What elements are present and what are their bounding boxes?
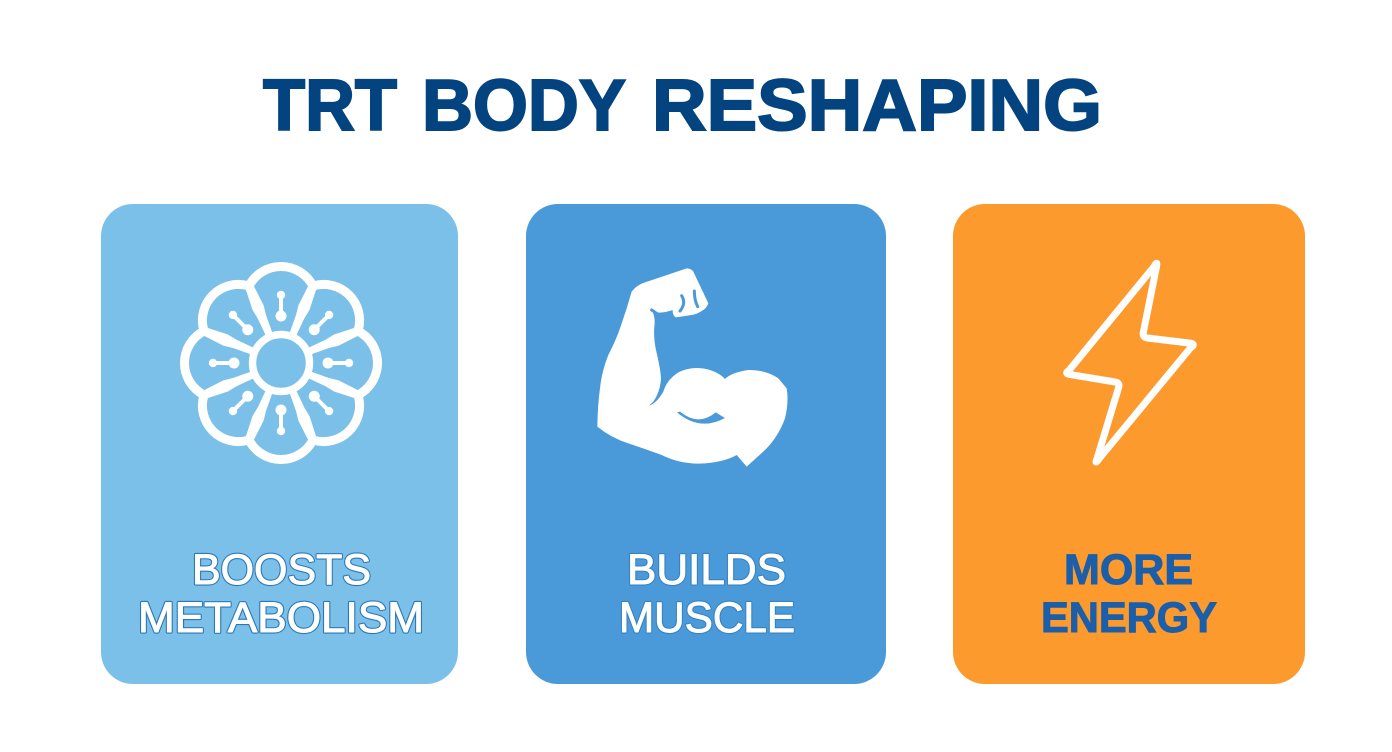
label: builds muscle: MUSCLE [619, 594, 795, 642]
title [263, 66, 1102, 146]
title: RESHAPING [652, 66, 1102, 146]
card background: light blue [101, 204, 458, 684]
label: boosts metabolism: BOOSTS [192, 546, 371, 594]
card background: medium blue [526, 204, 886, 684]
icon: lightning bolt [1067, 263, 1193, 462]
title: BODY [422, 66, 626, 146]
label: boosts metabolism: METABOLISM [138, 594, 424, 642]
panel: boosts metabolism [101, 204, 458, 684]
panel: builds muscle [526, 204, 886, 684]
label: builds muscle: BUILDS [627, 546, 786, 594]
label: builds muscle: BUILDS [627, 546, 786, 594]
label: more energy: ENERGY [1041, 594, 1217, 642]
label: builds muscle: MUSCLE [619, 594, 795, 642]
panel: more energy [953, 204, 1305, 684]
icon: flexed arm [597, 268, 788, 467]
icon: metabolism flower [184, 266, 378, 460]
label: more energy: MORE [1064, 546, 1193, 594]
label: boosts metabolism: BOOSTS [192, 546, 371, 594]
title: TRT [263, 66, 397, 146]
label: builds muscle [619, 546, 795, 642]
label: more energy [1041, 546, 1217, 642]
label: boosts metabolism [138, 546, 424, 642]
card background: orange [953, 204, 1305, 684]
label: boosts metabolism: METABOLISM [138, 594, 424, 642]
